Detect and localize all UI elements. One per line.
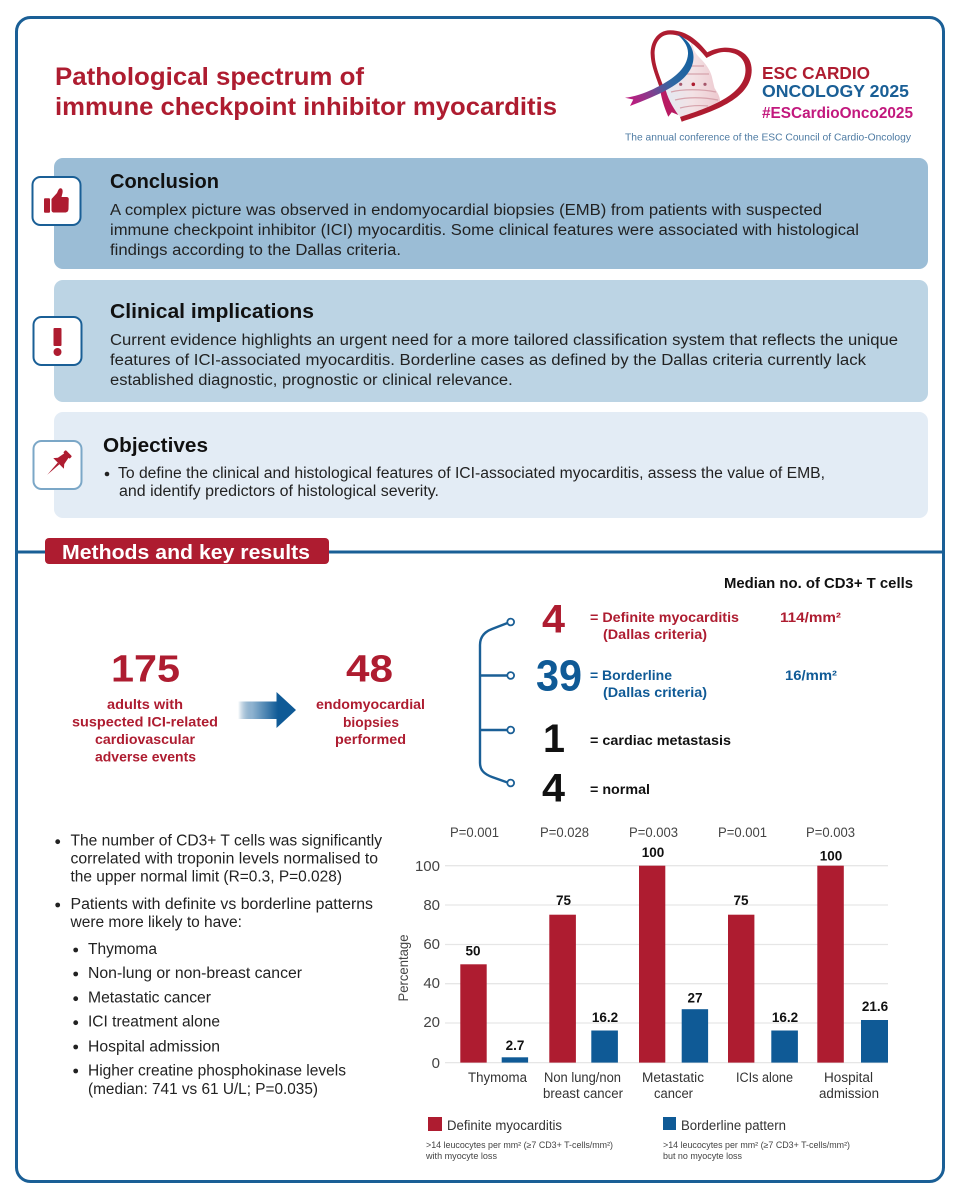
legend: definite myocarditis <box>425 1117 613 1161</box>
objectives text: and identify predictors of histological severity. <box>119 483 439 500</box>
conclusion text <box>110 202 859 259</box>
stat: 48 biopsies: 48 <box>346 649 393 691</box>
category labels: breast cancer <box>543 1086 623 1101</box>
implications text: Current evidence highlights an urgent need for a more tailored classification system that reflects the unique <box>110 332 898 349</box>
result: definite myocarditis: (Dallas criteria) <box>603 626 707 642</box>
legend: borderline pattern <box>663 1117 850 1161</box>
column heading: median CD3+ T cells: Median no. of CD3+ T cells <box>724 575 913 592</box>
data labels: 27 <box>687 991 703 1006</box>
logo wordmark line 2: ONCOLOGY 2025 <box>762 81 909 101</box>
conclusion text: findings according to the Dallas criteria. <box>110 242 401 259</box>
data labels: 75 <box>733 893 749 908</box>
conclusion text: immune checkpoint inhibitor (ICI) myocarditis. Some clinical features were associated with histological <box>110 222 859 239</box>
bars: definite myocarditis <box>460 866 844 1063</box>
data labels: 16.2 <box>772 1010 798 1025</box>
p values: P=0.003 <box>629 825 678 840</box>
data labels <box>465 845 889 1053</box>
panel: clinical implications <box>34 280 928 402</box>
text block: key findings: (median: 741 vs 61 U/L; P=0.035) <box>88 1081 318 1098</box>
logo: ESC Cardio Oncology 2025 <box>625 30 913 143</box>
legend: definite myocarditis: Definite myocarditis <box>447 1118 562 1133</box>
text block: key findings: the upper normal limit (R=0.3, P=0.028) <box>70 869 342 886</box>
heading: methods and key results: Methods and key results <box>62 542 310 564</box>
legend: borderline pattern: Borderline pattern <box>681 1118 786 1133</box>
objectives text: To define the clinical and histological features of ICI-associated myocarditis, assess the value of EMB, <box>118 465 825 482</box>
bars: borderline pattern <box>502 1009 888 1063</box>
result: cardiac metastasis: 1 <box>543 717 565 761</box>
data labels: 50 <box>465 944 481 959</box>
logo dome <box>665 42 720 119</box>
category labels: admission <box>819 1086 879 1101</box>
icon: pushpin <box>34 441 82 489</box>
stat: 175 adults: adults with <box>107 696 183 712</box>
title: immune checkpoint inhibitor myocarditis <box>55 93 557 121</box>
data labels: 16.2 <box>592 1010 618 1025</box>
implications text <box>110 332 898 389</box>
category labels: Metastatic <box>642 1070 704 1085</box>
y axis labels <box>415 858 440 1072</box>
text block: key findings: Metastatic cancer <box>88 990 211 1007</box>
objectives text <box>105 465 825 500</box>
logo heart <box>651 30 752 122</box>
category labels: ICIs alone <box>736 1070 793 1085</box>
stat: 48 biopsies: biopsies <box>343 714 399 730</box>
stat: 48 biopsies: performed <box>335 731 406 747</box>
heading: methods and key results <box>45 538 329 564</box>
heading: Conclusion <box>110 171 219 193</box>
stat: 175 adults: adverse events <box>95 749 196 765</box>
result: normal <box>542 767 650 811</box>
logo dome detail <box>671 66 718 108</box>
data labels: 100 <box>642 845 664 860</box>
y axis labels: 100 <box>415 858 440 875</box>
title <box>55 63 557 121</box>
category labels: Hospital <box>824 1070 873 1085</box>
p values: P=0.001 <box>718 825 767 840</box>
result: definite myocarditis: = Definite myocarditis <box>590 609 739 625</box>
result: definite myocarditis: 114/mm² <box>780 609 841 625</box>
y axis labels: 80 <box>423 897 440 914</box>
p values <box>450 825 855 840</box>
category labels: Thymoma <box>468 1070 527 1085</box>
icon: exclamation mark <box>34 317 82 365</box>
y axis labels: 60 <box>423 936 440 953</box>
bar chart <box>395 825 889 1101</box>
result: normal: = normal <box>590 781 650 797</box>
stat: 175 adults <box>72 649 218 765</box>
conclusion text: A complex picture was observed in endomyocardial biopsies (EMB) from patients with suspected <box>110 202 822 219</box>
result: borderline: 39 <box>536 652 582 701</box>
logo ribbon <box>625 34 694 106</box>
stat: 175 adults: 175 <box>111 649 180 691</box>
category labels <box>468 1070 879 1101</box>
result: cardiac metastasis <box>543 717 731 761</box>
implications text: established diagnostic, prognostic or clinical relevance. <box>110 372 513 389</box>
result: borderline: = Borderline <box>590 667 672 683</box>
bracket connector <box>480 619 514 786</box>
p values: P=0.003 <box>806 825 855 840</box>
y axis labels: 0 <box>432 1055 440 1072</box>
p values: P=0.028 <box>540 825 589 840</box>
legend: definite myocarditis: with myocyte loss <box>425 1151 497 1161</box>
title: Pathological spectrum of <box>55 63 365 91</box>
text block: key findings: Thymoma <box>88 941 157 958</box>
text block: key findings: ICI treatment alone <box>88 1014 220 1031</box>
result: borderline <box>536 652 837 701</box>
implications text: features of ICI-associated myocarditis. Borderline cases as defined by the Dallas criteria currently lack <box>110 352 866 369</box>
text block: key findings: Patients with definite vs borderline patterns <box>70 896 373 913</box>
category labels: cancer <box>654 1086 693 1101</box>
result: borderline: 16/mm² <box>785 667 837 683</box>
legend: borderline pattern: >14 leucocytes per mm² (≥7 CD3+ T-cells/mm²) <box>663 1140 850 1150</box>
p values: P=0.001 <box>450 825 499 840</box>
heading: Clinical implications <box>110 301 314 323</box>
logo ribbon tail pink <box>660 87 678 117</box>
y axis title: Percentage <box>395 934 411 1002</box>
text block: key findings: Non-lung or non-breast cancer <box>88 965 302 982</box>
category labels: Non lung/non <box>544 1070 621 1085</box>
data labels: 2.7 <box>506 1038 524 1053</box>
result: borderline: (Dallas criteria) <box>603 684 707 700</box>
heading: Objectives <box>103 435 208 457</box>
text block: key findings: Hospital admission <box>88 1038 220 1055</box>
result: definite myocarditis: 4 <box>542 597 566 641</box>
text block: key findings: The number of CD3+ T cells was significantly <box>70 833 382 850</box>
panel: conclusion <box>32 158 928 269</box>
arrow <box>238 692 296 728</box>
logo tagline: The annual conference of the ESC Council of Cardio-Oncology <box>625 132 912 144</box>
icon: thumbs up <box>32 177 80 225</box>
legend: definite myocarditis: >14 leucocytes per mm² (≥7 CD3+ T-cells/mm²) <box>426 1140 613 1150</box>
data labels: 21.6 <box>862 999 889 1014</box>
data labels: 100 <box>820 849 842 864</box>
legend: borderline pattern: but no myocyte loss <box>663 1151 742 1161</box>
y axis labels: 40 <box>423 975 440 992</box>
result: definite myocarditis <box>542 597 841 642</box>
logo hashtag: #ESCardioOnco2025 <box>762 105 913 122</box>
text block: key findings: correlated with troponin levels normalised to <box>70 850 378 868</box>
stat: 48 biopsies: endomyocardial <box>316 696 425 712</box>
stat: 175 adults: cardiovascular <box>95 731 196 747</box>
stat: 48 biopsies <box>316 649 425 747</box>
text block: key findings: Higher creatine phosphokinase levels <box>88 1063 346 1080</box>
logo wordmark line 1: ESC CARDIO <box>762 63 870 83</box>
result: normal: 4 <box>542 767 566 811</box>
panel: objectives <box>34 412 928 518</box>
data labels: 75 <box>556 893 571 908</box>
text block: key findings <box>55 833 382 1098</box>
result: cardiac metastasis: = cardiac metastasis <box>590 732 731 748</box>
text block: key findings: were more likely to have: <box>69 914 242 931</box>
y axis labels: 20 <box>423 1014 440 1031</box>
stat: 175 adults: suspected ICI-related <box>72 714 218 730</box>
